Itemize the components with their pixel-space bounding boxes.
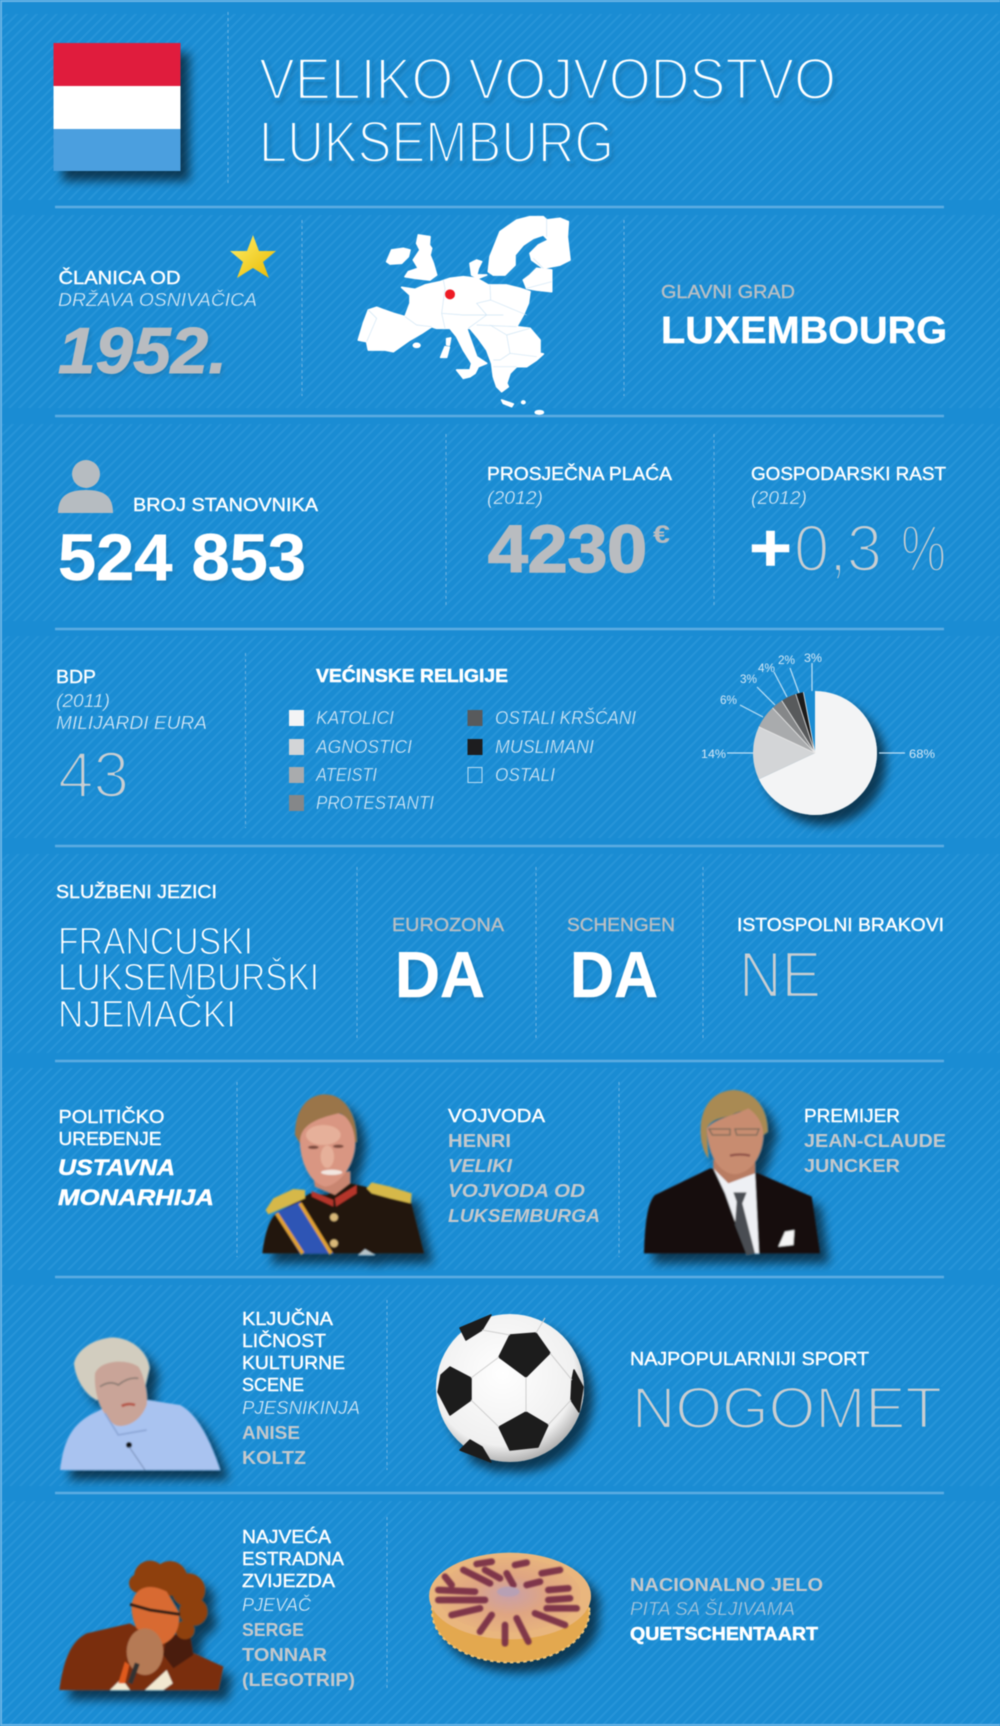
panel: economic growth [749,463,946,586]
legend item: Ateisti [289,765,377,785]
sport label: NAJPOPULARNIJI SPORT [630,1348,869,1369]
pie chart: religions: 3% [740,674,757,686]
Grand Duke title: LUKSEMBURGA [448,1205,600,1226]
pie chart: religions: 6% [720,695,737,707]
pie chart: religions [701,653,935,815]
pie chart: religions: 14% [701,749,726,761]
pop star label: NAJVEĆA [242,1526,332,1547]
panel: membership [58,235,276,387]
legend item: Ostali [468,765,555,785]
pie chart: religions: 68% [909,749,935,761]
system label: UREĐENJE [58,1128,162,1149]
panel: Grand Duke text [448,1105,600,1226]
growth year: (2012) [751,488,807,508]
legend item: Agnostici: AGNOSTICI [315,737,412,757]
icon: football [436,1314,584,1462]
icon: Luxembourg flag [54,43,180,171]
pop star name [242,1619,355,1690]
panel: Schengen [567,914,675,1011]
panel: religions legend [289,665,636,813]
population value: 524 853 [58,520,306,594]
languages list [58,921,319,1036]
legend item: Katolici: KATOLICI [316,708,394,728]
system value [58,1155,214,1210]
pie chart: religions: 4% [758,663,775,675]
role label: PREMIJER [804,1105,900,1126]
dish label: NACIONALNO JELO [630,1574,823,1595]
photo: Serge Tonnar [59,1561,223,1690]
cultural figure label: LIČNOST [242,1330,326,1351]
marker: Luxembourg [445,289,455,299]
legend item: Muslimani: MUSLIMANI [495,737,594,757]
salary value: 4230 [488,512,647,587]
panel: cultural figure text [242,1308,360,1468]
panel: national dish [630,1574,823,1644]
pop star label [242,1526,345,1591]
GDP year: (2011) [56,691,110,711]
cultural figure label: KLJUČNA [242,1308,334,1329]
Grand Duke title [448,1155,600,1226]
languages list: NJEMAČKI [58,992,236,1036]
panel: political system [58,1106,214,1210]
euro sign: € [653,521,670,549]
pie chart: religions: 3% [804,653,822,665]
languages list: LUKSEMBURŠKI [58,955,319,999]
cultural figure name [242,1422,306,1468]
GDP unit: MILIJARDI EURA [56,713,207,733]
growth label: GOSPODARSKI RAST [751,463,946,484]
icon: plum tart [429,1553,591,1662]
same-sex marriage label: ISTOSPOLNI BRAKOVI [737,914,944,935]
map: Europe with Luxembourg marker [358,217,570,414]
growth value: % [901,511,946,585]
title: VELIKO VOJVODSTVO [259,47,836,112]
founding state note: DRŽAVA OSNIVAČICA [58,289,257,310]
Grand Duke name: HENRI [448,1130,511,1151]
cultural figure name: ANISE [242,1422,300,1443]
cultural figure label: KULTURNE [242,1352,345,1373]
same-sex marriage value: NE [739,938,821,1011]
dish description: PITA SA ŠLJIVAMA [630,1598,795,1619]
legend heading: VEĆINSKE RELIGIJE [316,665,508,686]
role label: VOJVODA [448,1105,546,1126]
pop star name: (LEGOTRIP) [242,1669,355,1690]
pop star name: TONNAR [242,1644,327,1665]
Schengen label: SCHENGEN [567,914,675,935]
capital label: GLAVNI GRAD [661,281,795,302]
legend item: Ostali: OSTALI [495,765,555,785]
Prime Minister name [804,1130,946,1176]
member since label: ČLANICA OD [58,267,180,288]
languages list: FRANCUSKI [58,921,253,963]
system value: USTAVNA [58,1155,175,1180]
GDP label: BDP [56,666,96,687]
Schengen value: DA [570,938,658,1011]
panel: average salary [487,463,673,587]
pop star label: ESTRADNA [242,1548,345,1569]
panel: capital [661,281,947,352]
panel: pop star text [242,1526,355,1690]
member year: 1952. [58,314,227,387]
capital name: LUXEMBOURG [661,310,947,352]
Grand Duke title: VOJVODA OD [448,1180,585,1201]
GDP value: 43 [58,738,129,811]
Eurozone label: EUROZONA [392,914,505,935]
dish name: QUETSCHENTAART [630,1624,818,1644]
Eurozone value: DA [395,938,485,1011]
sport value: NOGOMET [632,1376,942,1441]
growth plus sign: + [749,510,792,586]
languages label: SLUŽBENI JEZICI [56,881,217,902]
occupation: PJESNIKINJA [242,1398,360,1418]
panel: popular sport [630,1348,942,1441]
Prime Minister name: JEAN-CLAUDE [804,1130,946,1151]
panel: Prime Minister text [804,1105,946,1176]
Grand Duke title: VELIKI [448,1155,513,1176]
icon: EU star [230,235,276,278]
pie chart: religions: 2% [778,655,795,667]
cultural figure label: SCENE [242,1374,304,1395]
system value: MONARHIJA [58,1185,214,1210]
title: LUKSEMBURG [259,110,614,175]
title [259,47,836,175]
panel: GDP [56,666,207,811]
panel: Eurozone [392,914,505,1011]
salary label: PROSJEČNA PLAĆA [487,463,673,484]
photo: Anise Koltz [60,1337,220,1470]
growth value: 0,3 [794,511,882,585]
Prime Minister name: JUNCKER [804,1155,900,1176]
system label: POLITIČKO [58,1106,164,1127]
pop star label: ZVIJEZDA [242,1570,336,1591]
growth value [794,511,946,585]
legend item: Ostali krscani: OSTALI KRŠĆANI [495,707,636,728]
cultural figure name: KOLTZ [242,1447,306,1468]
occupation: PJEVAČ [242,1594,312,1615]
photo: Jean-Claude Juncker [644,1090,820,1255]
legend item: Protestanti: PROTESTANTI [316,793,434,813]
pop star name: SERGE [242,1619,304,1640]
panel: official languages [56,881,319,1036]
photo: Grand Duke Henri [262,1094,424,1255]
panel: population [58,460,319,594]
system label [58,1106,164,1149]
panel: header [54,43,836,175]
population label: BROJ STANOVNIKA [133,494,319,515]
cultural figure label [242,1308,345,1395]
legend item: Ateisti: ATEISTI [315,765,377,785]
icon: person [58,460,113,513]
panel: same-sex marriage [737,914,944,1011]
salary year: (2012) [487,488,543,508]
